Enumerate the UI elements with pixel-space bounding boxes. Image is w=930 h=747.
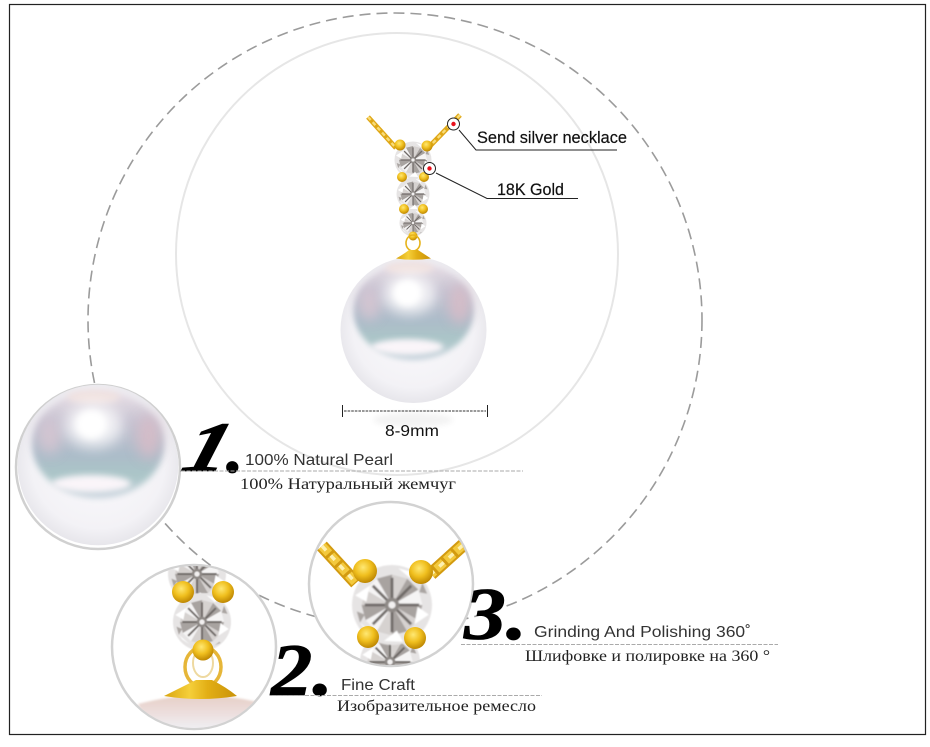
russian caption: Шлифовке и полировке на 360 ° [525,648,770,665]
close-up jewellery [138,566,254,728]
numeral 2: 2. [270,630,333,712]
top diamond [168,566,226,596]
english caption: 100% Natural Pearl [245,452,393,469]
pearl shadow [373,413,453,427]
numeral 3: 3. [463,574,527,656]
numeral 1 dot: . [226,410,244,488]
icon: bail ring [406,235,420,251]
cap [164,680,237,699]
icon: middle diamond [396,178,430,210]
beads [353,559,377,583]
leader line [459,130,617,150]
circle outline [309,502,473,666]
icon: chain [368,115,460,148]
pearl top [138,696,254,728]
russian caption: Изобразительное ремесло [337,698,536,715]
ring [185,647,221,687]
panel: natural pearl [16,385,523,549]
main pearl [340,257,486,403]
pendant necklace [368,115,460,251]
callout text: 18K Gold [497,181,564,199]
marker [448,118,460,130]
english caption: Fine Craft [341,677,416,694]
inner thin circle [176,33,618,475]
size label: 8-9mm [385,423,439,440]
dashed rule [181,470,523,472]
panel: grinding and polishing [308,500,778,668]
english caption: Grinding And Polishing 360˚ [534,624,751,641]
leader line [436,173,578,198]
chain [322,545,463,583]
circle outline [112,565,276,729]
main diamond [352,565,432,645]
callout text: Send silver necklace [477,128,627,147]
dashed rule [461,644,778,646]
marker [424,162,436,174]
circle outline [16,385,180,549]
russian caption: 100% Натуральный жемчуг [240,476,456,493]
lower diamond [360,642,420,665]
size dimension [342,405,488,440]
callout: silver necklace [448,118,627,150]
beads [172,581,194,603]
close-up jewellery [318,540,466,665]
large dashed orbit circle [88,13,702,627]
icon: gold beads [394,140,432,240]
callout: 18K gold [424,162,578,199]
pearl close-up [18,385,178,545]
numeral 1: 1 [175,407,243,487]
panel: fine craft [112,545,542,730]
dashed rule [272,694,542,696]
dimension bar [342,405,488,417]
icon: top diamond [394,142,432,178]
pearl cap [396,250,431,260]
diamond [173,593,231,651]
icon: lower diamond [400,210,426,236]
